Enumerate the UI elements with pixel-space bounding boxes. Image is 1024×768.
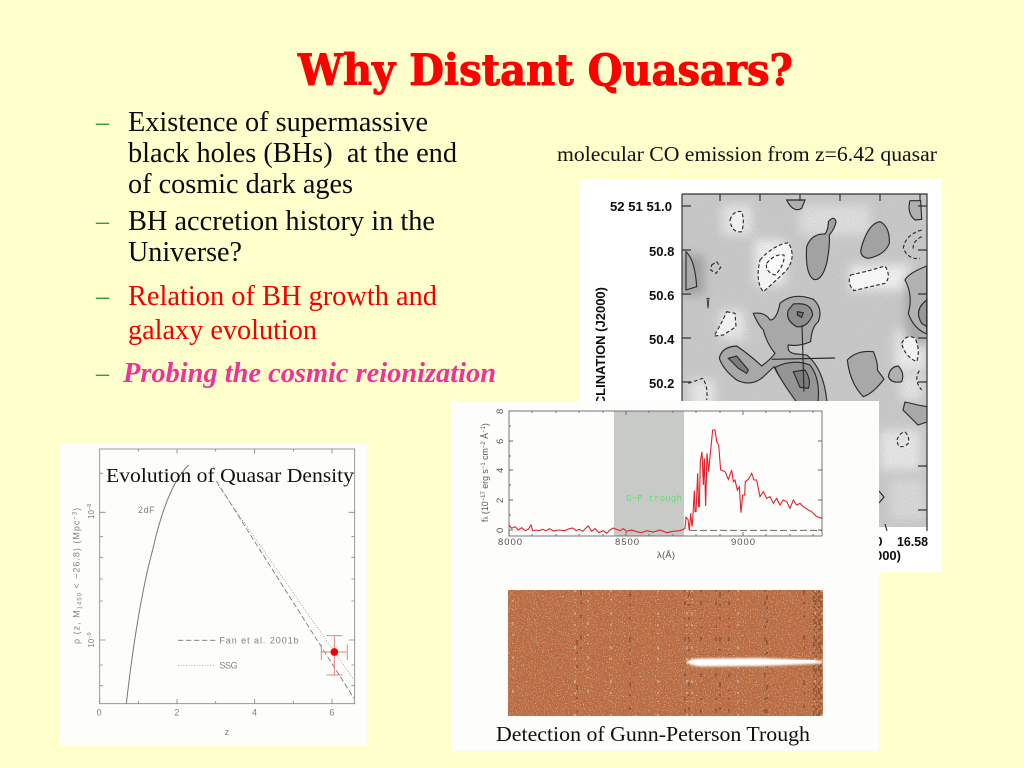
spectrum axis labels: −2 <box>481 441 487 448</box>
density chart labels: 0 <box>97 707 102 717</box>
bullet: cosmic reionization: Probing the cosmic reionization <box>122 358 496 389</box>
spectrum axis labels: 0 <box>495 528 506 533</box>
bullet: supermassive black holes: black holes (BHs) at the end <box>128 138 457 169</box>
map axis labels: 50 <box>868 534 882 549</box>
bullet: accretion history: BH accretion history in the <box>128 206 435 237</box>
caption: Gunn-Peterson trough: Detection of Gunn-Peterson Trough <box>496 722 811 746</box>
spectrum axis labels: 6 <box>495 439 506 444</box>
map axis labels: 50.2 <box>649 376 674 391</box>
bullet: supermassive black holes: of cosmic dark ages <box>128 169 353 200</box>
map contours <box>686 200 927 531</box>
density chart labels: −3 <box>73 511 79 520</box>
two-dimensional spectrum image <box>508 590 823 716</box>
spectrum axis labels: Å <box>480 433 490 441</box>
bullet: accretion history <box>95 206 435 268</box>
bullet: BH growth and galaxy evolution: galaxy evolution <box>128 315 317 346</box>
density chart labels: 4 <box>252 707 257 717</box>
bullet: supermassive black holes <box>95 107 457 200</box>
spectrum axis labels <box>480 409 755 561</box>
map axis labels: DECLINATION (J2000) <box>593 287 608 423</box>
legend <box>178 639 215 642</box>
bullet: cosmic reionization: – <box>95 358 110 389</box>
spectrum axis labels: erg s <box>480 469 490 491</box>
density chart labels: Fan et al. 2001b <box>219 635 299 645</box>
spectrum axis labels: −1 <box>481 425 487 433</box>
data point with error bars <box>321 636 347 675</box>
spectrum axis labels: λ(Å) <box>657 550 675 561</box>
density chart labels: −9 <box>87 632 93 639</box>
map axis labels: 16.58 <box>897 534 928 549</box>
map axis labels: 50.8 <box>649 244 674 259</box>
density chart labels: SSG <box>219 660 238 670</box>
2dF curve <box>126 465 189 704</box>
panel: CO emission contour map <box>580 179 942 572</box>
spectrum axis labels: 8500 <box>615 537 639 548</box>
density chart labels: < −26.8) (Mpc <box>72 520 82 592</box>
bullet: BH growth and galaxy evolution: Relation of BH growth and <box>128 281 437 312</box>
density chart labels: 6 <box>329 707 334 717</box>
density chart labels: 10 <box>87 510 96 519</box>
spectrum chart <box>480 409 822 561</box>
G-P trough label: G−P trough <box>626 493 682 504</box>
density chart labels: ) <box>72 507 82 511</box>
density chart labels: z <box>225 727 230 737</box>
map axis labels: 50.6 <box>649 288 674 303</box>
map greyscale image <box>682 194 927 527</box>
spectrum axis labels: 8000 <box>498 537 522 548</box>
density chart labels: −8 <box>87 504 93 510</box>
spectrum curve <box>509 430 822 533</box>
bullet: supermassive black holes: – <box>95 107 110 138</box>
spectrum axis labels: cm <box>480 448 490 462</box>
spectrum axis labels: −1 <box>481 462 487 469</box>
bullet: supermassive black holes: Existence of supermassive <box>128 107 428 138</box>
spectrum axis labels: 8 <box>495 409 506 414</box>
spectrum axis labels: fλ (10 <box>480 501 490 522</box>
bullet: accretion history: Universe? <box>128 237 242 268</box>
bullet: BH growth and galaxy evolution <box>95 281 437 346</box>
title: Why Distant Quasars? <box>297 46 793 96</box>
spectrum axis labels: 2 <box>495 498 506 503</box>
spectrum axis labels: 4 <box>495 468 506 473</box>
caption: CO emission: molecular CO emission from z=6.42 quasar <box>557 142 937 166</box>
density chart labels: 1450 <box>78 592 84 609</box>
map axis labels <box>593 199 928 563</box>
Fan et al. line <box>216 481 354 698</box>
map axis labels: 50.4 <box>649 332 675 347</box>
spectrum axis labels: ) <box>480 423 490 426</box>
density chart labels: 10 <box>87 639 96 648</box>
density chart axes <box>100 449 355 704</box>
map axis labels: 52 51 51.0 <box>610 199 672 214</box>
map frame and ticks <box>682 194 927 531</box>
bullet: BH growth and galaxy evolution: – <box>95 281 110 312</box>
quasar emission streak <box>686 658 822 666</box>
SSG line <box>218 485 354 680</box>
density chart labels: 2dF <box>138 505 155 515</box>
density chart labels <box>72 504 334 737</box>
density chart labels: ρ (z, M <box>72 609 82 644</box>
bullet: accretion history: – <box>95 206 110 237</box>
caption: quasar density: Evolution of Quasar Density <box>106 465 354 487</box>
density chart labels: 2 <box>174 707 179 717</box>
map axis labels: (J2000) <box>856 548 901 563</box>
spectrum axis labels: 9000 <box>731 537 755 548</box>
spectrum axis labels: −17 <box>481 491 487 501</box>
